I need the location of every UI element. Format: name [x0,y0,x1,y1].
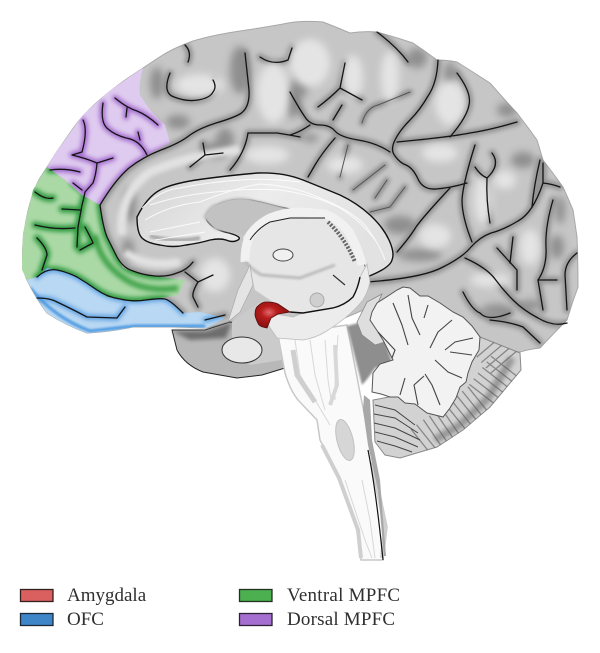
pons [266,264,370,340]
cerebellum outer folia [373,337,521,458]
cerebellum white matter (arbor vitae) [370,287,480,417]
corpus callosum [137,173,393,277]
region: Dorsal MPFC (purple) [47,68,170,204]
interthalamic adhesion oval [273,249,293,261]
dark wedge between brainstem and cerebellum [347,310,392,385]
legend: Dorsal MPFC: Dorsal MPFC [287,609,395,630]
legend: Ventral MPFC: Ventral MPFC [287,585,400,606]
pituitary oval [222,337,262,363]
legend: Dorsal MPFC [240,609,395,630]
legend: Amygdala: Amygdala [67,585,147,606]
brain illustration [22,21,578,560]
legend: Amygdala [20,585,147,606]
mammillary body [310,293,324,307]
brainstem and spinal cord [278,325,387,560]
legend: OFC: OFC [67,609,104,630]
thalamus and midbrain region [203,198,365,322]
legend: OFC [20,609,104,630]
cerebellum ring [357,294,385,345]
region: Ventral MPFC (green) [22,167,185,302]
legend [20,585,400,630]
cerebrum shading [100,32,578,348]
amygdala (red) [255,302,290,328]
cerebrum base [22,21,578,352]
subcortical base under frontal lobe [172,300,285,378]
cortical sulci lines [35,32,577,343]
region: OFC (blue) [27,268,225,333]
